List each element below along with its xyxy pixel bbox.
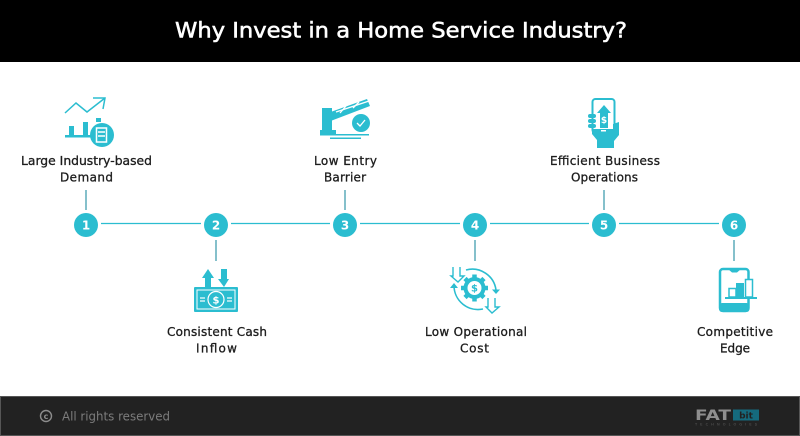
label: large industry-based demand	[21, 154, 152, 184]
label: low entry barrier	[314, 154, 377, 184]
icon: gear with dollar and cycle arrows: $	[471, 284, 478, 294]
label: competitive edge: Competitive	[697, 325, 773, 339]
step 1 marker: 1	[82, 218, 90, 232]
label: consistent cash inflow: Consistent Cash	[167, 325, 267, 339]
step 5 marker: 5	[600, 218, 608, 232]
label: efficient business operations	[550, 154, 660, 184]
icon: barrier gate	[320, 99, 370, 139]
icon: smartphone with bars	[719, 269, 757, 312]
step 3 marker	[333, 213, 357, 237]
label: low operational cost: Cost	[460, 342, 489, 356]
step 3 marker: 3	[341, 218, 349, 232]
label: low entry barrier: Barrier	[324, 170, 366, 184]
copyright icon	[40, 410, 52, 422]
label: competitive edge	[697, 325, 773, 356]
icon: phone with dollar in hand	[588, 99, 619, 148]
label: efficient business operations: Efficient Business	[550, 154, 660, 168]
logo	[694, 408, 759, 426]
label: competitive edge: Edge	[720, 342, 750, 356]
label: consistent cash inflow: Inflow	[196, 342, 237, 356]
copyright icon: c	[44, 412, 49, 421]
step 6 marker	[722, 213, 746, 237]
label: consistent cash inflow	[167, 325, 267, 356]
label: large industry-based demand: Large Industry-based	[21, 154, 152, 168]
step 6 marker: 6	[730, 218, 738, 232]
step 5 marker	[592, 213, 616, 237]
logo: bit	[739, 412, 754, 422]
footer bar	[0, 396, 800, 436]
logo: FAT	[695, 408, 732, 424]
icon: cash with arrows	[194, 269, 238, 312]
title: Why Invest in a Home Service Industry?	[175, 18, 627, 42]
icon: gear with dollar and cycle arrows	[450, 267, 500, 313]
label: efficient business operations: Operations	[571, 170, 638, 184]
step 4 marker: 4	[471, 218, 479, 232]
step 2 marker: 2	[212, 218, 220, 232]
icon: cash with arrows: $	[213, 296, 220, 306]
label: large industry-based demand: Demand	[60, 170, 113, 184]
step 4 marker	[463, 213, 487, 237]
step 2 marker	[204, 213, 228, 237]
label: low operational cost: Low Operational	[425, 325, 527, 339]
copyright text: All rights reserved	[62, 410, 170, 424]
timeline	[74, 190, 746, 261]
icon: phone with dollar in hand: $	[601, 116, 607, 126]
title	[0, 0, 800, 62]
step 1 marker	[74, 213, 98, 237]
label: low operational cost	[425, 325, 527, 356]
icon: growth chart and building	[65, 98, 114, 147]
logo: TECHNOLOGIES	[694, 422, 758, 426]
label: low entry barrier: Low Entry	[314, 154, 377, 168]
